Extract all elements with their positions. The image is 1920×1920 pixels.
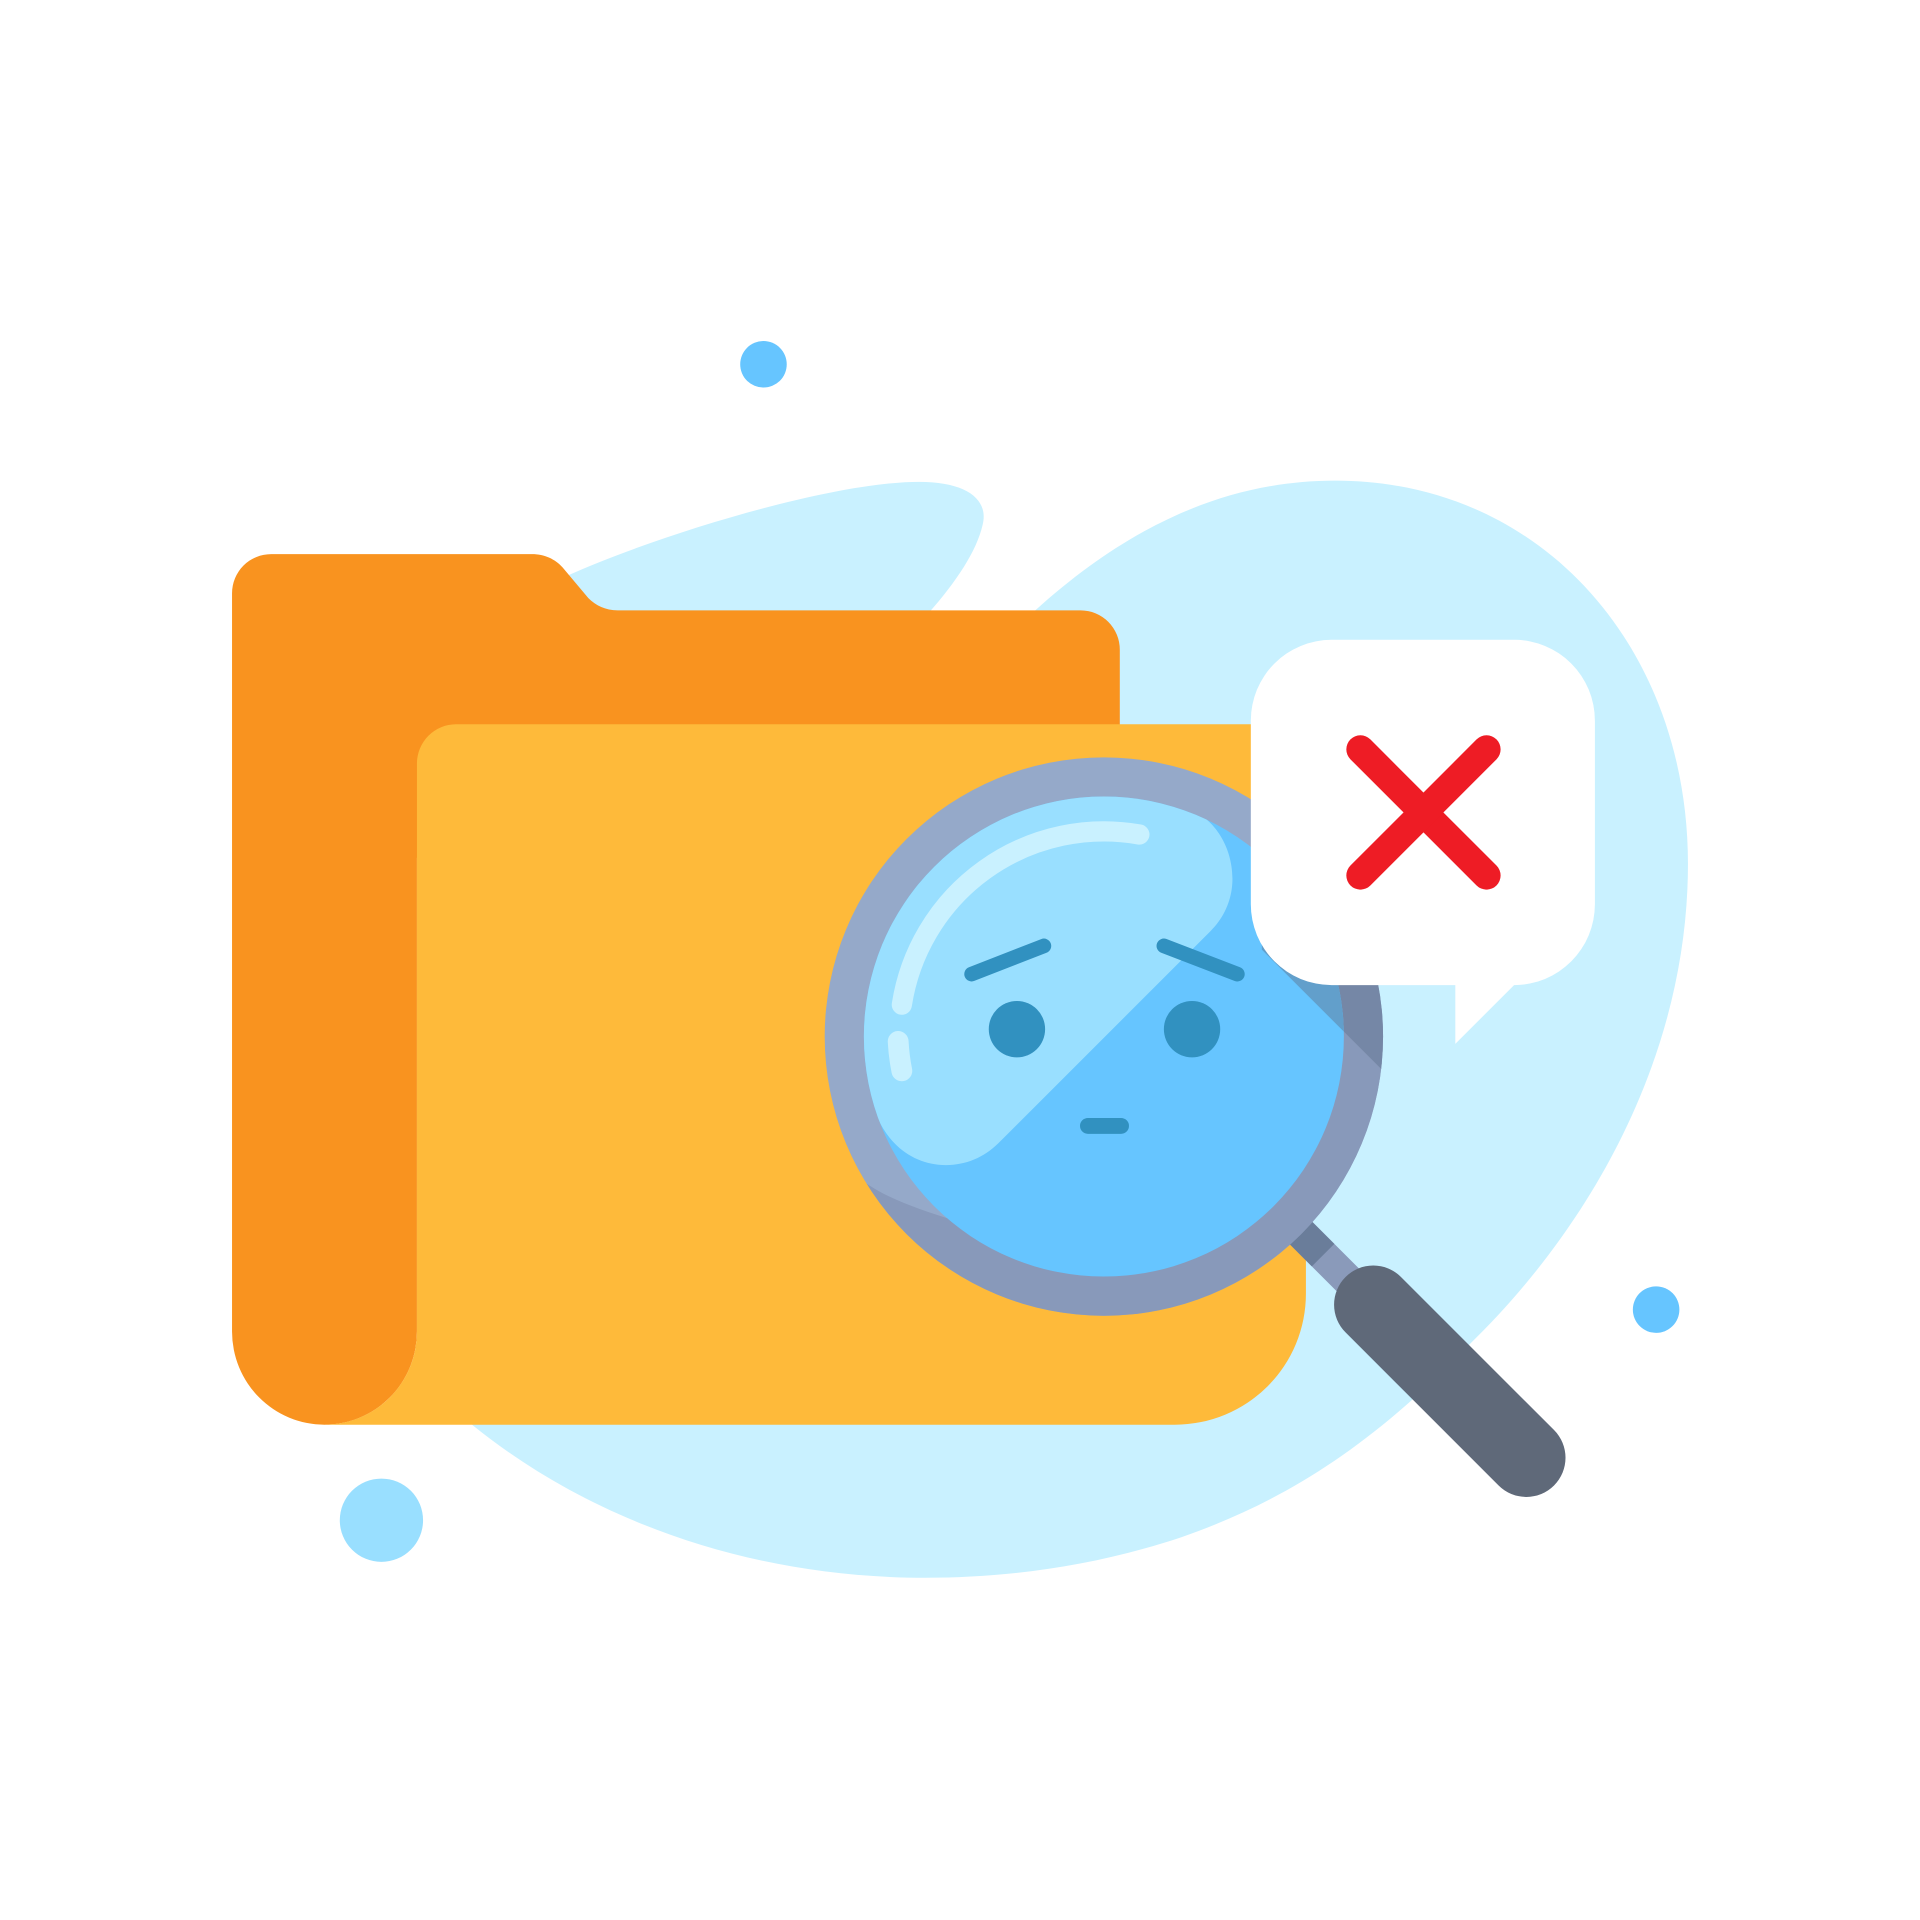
background blob: leaf xyxy=(566,482,984,613)
right eye xyxy=(1164,1001,1220,1057)
left eyebrow xyxy=(972,946,1044,974)
speech bubble with red cross xyxy=(1251,640,1595,1044)
sad face xyxy=(972,946,1237,1126)
magnifying glass xyxy=(809,735,1526,1458)
folder xyxy=(232,554,1306,1425)
shine arc: long xyxy=(902,831,1139,1005)
handle grip xyxy=(1373,1305,1526,1458)
folder back panel xyxy=(232,554,1120,1425)
shine arc: short xyxy=(898,1041,902,1071)
background blob: large xyxy=(472,481,1688,1578)
handle neck xyxy=(1274,1206,1366,1298)
red cross icon xyxy=(1360,749,1487,876)
lens rim xyxy=(824,757,1384,1316)
illustration: folder search with no result xyxy=(232,341,1688,1578)
right eyebrow xyxy=(1164,946,1237,974)
mouth xyxy=(1088,1119,1121,1132)
bubble body xyxy=(1251,640,1595,985)
left eye xyxy=(989,1001,1045,1057)
dot: bottom left xyxy=(340,1479,423,1562)
lens highlight xyxy=(846,784,1232,1165)
folder front panel xyxy=(325,724,1306,1425)
dot: right xyxy=(1633,1286,1679,1333)
dot: top xyxy=(740,341,787,388)
lens shadow from bubble xyxy=(1262,944,1344,1031)
lens glass xyxy=(864,796,1344,1276)
bubble tail xyxy=(1455,980,1519,1044)
